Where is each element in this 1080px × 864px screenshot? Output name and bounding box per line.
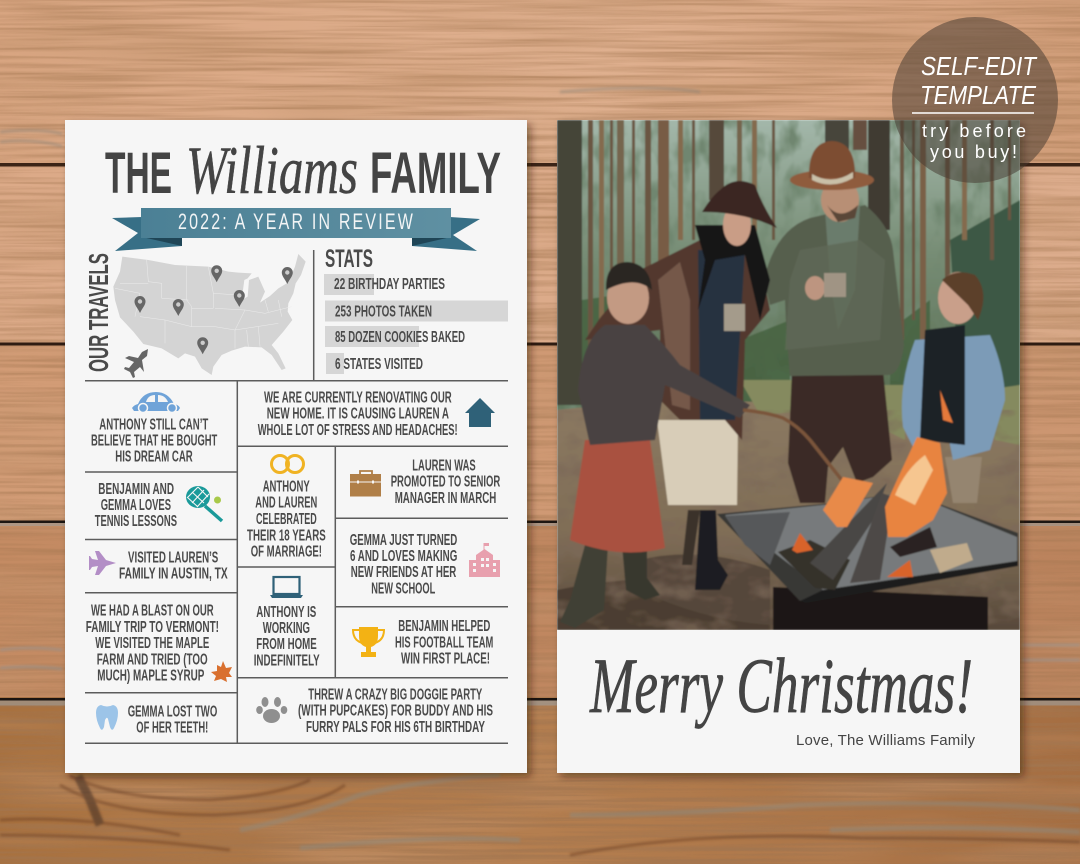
cell: vermont trip <box>86 603 232 685</box>
cell: renovation <box>258 390 495 439</box>
text: working from home: ANTHONY IS <box>256 604 316 621</box>
icon: laptop <box>270 577 303 598</box>
text: lost teeth: GEMMA LOST TWO <box>128 703 217 720</box>
text: anniversary: ANTHONY <box>263 479 310 496</box>
panel: year in review card <box>65 120 527 773</box>
icon: trophy <box>353 627 384 657</box>
stat bar: states visited <box>326 353 423 374</box>
text: tennis: GEMMA LOVES <box>101 497 171 514</box>
badge: self-edit template: TEMPLATE <box>920 80 1037 110</box>
text: vermont trip: WE HAD A BLAST ON OUR <box>91 603 214 620</box>
photo: family around fire pit <box>557 120 1020 630</box>
text: new school: NEW SCHOOL <box>371 580 435 597</box>
icon: house <box>465 398 495 427</box>
stats divider <box>313 250 315 381</box>
icon: purple plane <box>89 551 116 575</box>
text: tennis <box>95 481 177 530</box>
title: The Williams Family <box>105 132 501 208</box>
text: football: WIN FIRST PLACE! <box>401 651 490 668</box>
signature: Love, The Williams Family <box>796 732 976 749</box>
text: renovation: WE ARE CURRENTLY RENOVATING OUR <box>264 390 452 407</box>
text: doggie party <box>298 686 493 736</box>
text: anniversary: AND LAUREN <box>255 495 317 512</box>
cell: austin trip <box>89 550 228 583</box>
text: new school <box>350 532 457 597</box>
text: working from home: INDEFINITELY <box>254 652 320 669</box>
icon: car <box>132 392 180 412</box>
text: anniversary: OF MARRIAGE! <box>251 543 322 560</box>
text: lost teeth <box>128 703 217 736</box>
badge: self-edit template: try before <box>922 121 1026 141</box>
cell: football trophy <box>353 618 493 668</box>
flames <box>792 390 953 577</box>
icon: airplane <box>124 349 148 378</box>
text: dream car <box>91 416 217 466</box>
cell: tennis <box>95 481 222 530</box>
stat bar: photos taken <box>325 300 508 322</box>
text: vermont trip: FAMILY TRIP TO VERMONT! <box>86 619 219 636</box>
text: football <box>395 618 493 668</box>
text: lost teeth: OF HER TEETH! <box>136 719 208 736</box>
stat bar: photos taken: 253 PHOTOS TAKEN <box>335 304 432 320</box>
text: dream car: HIS DREAM CAR <box>115 449 193 466</box>
cell: promotion <box>350 458 501 507</box>
text: renovation: WHOLE LOT OF STRESS AND HEADACHES! <box>258 422 458 439</box>
pin: minnesota <box>211 265 222 282</box>
badge: self-edit template <box>892 17 1058 183</box>
text: promotion <box>391 458 501 507</box>
text: promotion: LAUREN WAS <box>412 458 476 475</box>
text: anniversary <box>247 479 326 560</box>
title: The Williams Family: Williams <box>186 132 358 208</box>
fire pit <box>717 483 1018 630</box>
text: working from home: WORKING <box>263 620 310 637</box>
ribbon banner: 2022 a year in review: 2022: A YEAR IN REVIEW <box>178 209 415 234</box>
text: dream car: ANTHONY STILL CAN’T <box>99 416 208 433</box>
text: vermont trip <box>86 603 219 685</box>
usa silhouette <box>113 254 306 375</box>
heading: stats: STATS <box>325 245 373 273</box>
text: austin trip: FAMILY IN AUSTIN, TX <box>119 566 228 583</box>
pin: texas <box>197 337 208 354</box>
girl <box>560 262 750 628</box>
cell: rings anniversary <box>247 456 326 560</box>
text: working from home: FROM HOME <box>256 636 317 653</box>
forest backdrop <box>557 120 1020 420</box>
cell: lost teeth <box>96 703 217 736</box>
forest floor <box>557 380 1020 630</box>
map: united states with pins <box>113 254 306 375</box>
text: renovation <box>258 390 458 439</box>
man <box>764 141 904 503</box>
text: austin trip: VISITED LAUREN’S <box>128 550 218 567</box>
text: new school: GEMMA JUST TURNED <box>350 532 457 549</box>
title: The Williams Family: THE <box>105 141 172 206</box>
stat bar: cookies baked <box>325 326 465 347</box>
stat bar: birthday parties <box>324 274 445 295</box>
badge: self-edit template: you buy! <box>930 142 1017 162</box>
text: new school: 6 AND LOVES MAKING <box>350 548 457 565</box>
pin: illinois <box>234 290 245 307</box>
text: new school: NEW FRIENDS AT HER <box>351 564 457 581</box>
text: dream car: BELIEVE THAT HE BOUGHT <box>91 432 217 449</box>
boy <box>902 272 1005 503</box>
text: football: BENJAMIN HELPED <box>398 618 490 635</box>
text: renovation: NEW HOME. IT IS CAUSING LAUREN A <box>267 406 449 423</box>
text: tennis: BENJAMIN AND <box>98 481 174 498</box>
grid of highlights <box>85 381 508 744</box>
text: anniversary: CELEBRATED <box>256 511 317 528</box>
text: promotion: PROMOTED TO SENIOR <box>391 474 501 491</box>
stat bar: birthday parties: 22 BIRTHDAY PARTIES <box>334 276 445 293</box>
heading: our travels: OUR TRAVELS <box>83 253 114 372</box>
title: The Williams Family: FAMILY <box>370 141 501 206</box>
text: doggie party: FURRY PALS FOR HIS 6TH BIRTHDAY <box>306 719 485 736</box>
icon: tooth <box>96 705 118 730</box>
icon: maple leaf <box>211 661 232 682</box>
text: vermont trip: MUCH) MAPLE SYRUP <box>97 668 204 685</box>
pin: colorado <box>173 299 184 316</box>
cell: dream car <box>91 392 217 466</box>
badge: self-edit template: SELF-EDIT <box>921 51 1038 81</box>
pin: vermont <box>282 267 293 284</box>
cell: working from home <box>254 577 320 669</box>
cell: new school <box>350 532 500 597</box>
icon: school <box>469 543 500 577</box>
pin: nevada <box>134 296 146 313</box>
text: football: HIS FOOTBALL TEAM <box>395 634 493 651</box>
text: vermont trip: FARM AND TRIED (TOO <box>97 651 208 668</box>
text: anniversary: THEIR 18 YEARS <box>247 527 326 544</box>
ribbon banner: 2022 a year in review <box>112 208 480 251</box>
text: tennis: TENNIS LESSONS <box>95 513 177 530</box>
roasting stick <box>742 408 842 481</box>
stat bar: cookies baked: 85 DOZEN COOKIES BAKED <box>335 329 465 346</box>
text: austin trip <box>119 550 228 583</box>
panel: christmas photo card <box>557 120 1020 773</box>
text: promotion: MANAGER IN MARCH <box>395 490 496 507</box>
icon: tennis racket <box>186 486 222 521</box>
panel: stats <box>324 245 508 374</box>
stat bar: states visited: 6 STATES VISITED <box>335 356 423 373</box>
text: vermont trip: WE VISITED THE MAPLE <box>95 635 209 652</box>
text: doggie party: (WITH PUPCAKES) FOR BUDDY AND HIS <box>298 703 493 720</box>
cell: doggie party <box>256 686 493 736</box>
text: doggie party: THREW A CRAZY BIG DOGGIE PARTY <box>308 686 482 703</box>
text: working from home <box>254 604 320 669</box>
icon: wedding rings <box>272 456 304 472</box>
woman <box>585 181 777 590</box>
icon: paw print <box>256 697 287 723</box>
icon: briefcase <box>350 471 381 496</box>
